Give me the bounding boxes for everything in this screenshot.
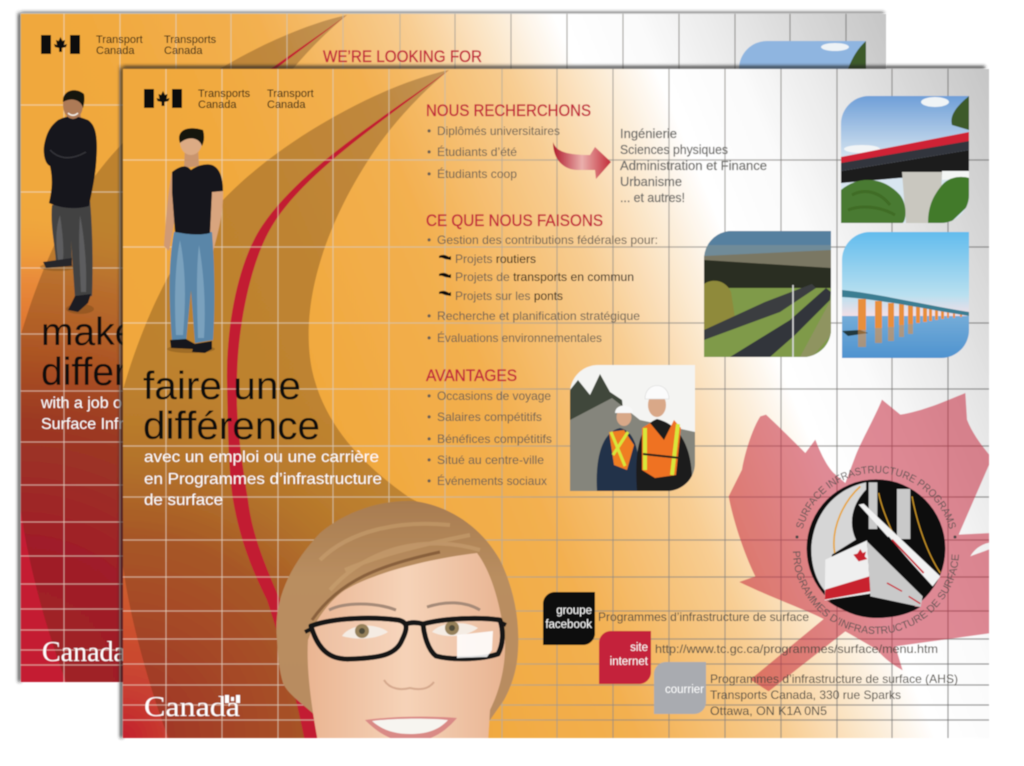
photo: two workers in safety vests (570, 365, 695, 491)
contact: website: http://www.tc.gc.ca/programmes/surface/menu.htm (655, 642, 938, 656)
section: avantages: AVANTAGES (426, 366, 517, 385)
list of fields (620, 127, 767, 205)
headline: faire une (143, 365, 301, 408)
eyes (342, 621, 478, 639)
section: avantages: Occasions de voyage (437, 389, 551, 403)
section: ce que nous faisons: Gestion des contributions fédérales pour: (437, 233, 658, 247)
red swoosh line (227, 70, 449, 742)
contact: mail: Ottawa, ON K1A 0N5 (710, 704, 827, 718)
section: avantages: Bénéfices compétitifs (437, 432, 552, 446)
government signature: Transports (198, 88, 251, 100)
front poster shadow (120, 66, 985, 738)
list of fields: Sciences physiques (620, 143, 728, 157)
section: avantages: • (427, 432, 431, 446)
grid lines overlay (123, 69, 989, 738)
government signature (144, 88, 314, 111)
list of fields: Ingénierie (620, 127, 677, 141)
contact: facebook group: Programmes d’infrastructure de surface (598, 610, 809, 624)
back poster photo sliver (739, 41, 866, 69)
section: nous recherchons: Étudiants d’été (437, 144, 517, 159)
front poster (French version) (122, 68, 990, 739)
section: ce que nous faisons: Projets de transports en commun (455, 270, 634, 284)
section: nous recherchons: • (427, 124, 431, 138)
contact: facebook group: facebook (545, 619, 592, 631)
headline (143, 370, 319, 440)
subtitle: avec un emploi ou une carrière (144, 449, 379, 466)
back poster government signature (41, 34, 217, 57)
logo: surface infrastructure programs: PROGRAMMES D’INFRASTRUCTURE DE SURFACE (792, 550, 960, 634)
section: avantages: • (427, 410, 431, 424)
back poster man with crossed arms (40, 90, 97, 314)
lens glare (457, 631, 493, 658)
list of fields: Administration et Finance (620, 159, 767, 173)
section: avantages: Événements sociaux (437, 473, 547, 488)
glasses (305, 618, 506, 659)
contact: website (599, 631, 938, 684)
back poster shadow (18, 12, 884, 682)
back poster subtitle: with a job or career (40, 395, 178, 412)
face (308, 553, 505, 742)
section: ce que nous faisons: Projets sur les ponts (455, 289, 563, 303)
logo: surface infrastructure programs (792, 465, 960, 634)
back poster body: difference (41, 351, 212, 394)
subtitle: en Programmes d’infrastructure (144, 471, 382, 488)
brown swoosh (120, 70, 449, 742)
section: avantages: • (427, 389, 431, 403)
Canada wordmark: Canada (144, 691, 240, 723)
section: ce que nous faisons: Évaluations environnementales (437, 330, 602, 345)
section: nous recherchons: • (427, 145, 431, 159)
back poster (English version) (18, 12, 887, 687)
section: nous recherchons (426, 101, 591, 181)
list of fields: Urbanisme (620, 175, 682, 189)
section: ce que nous faisons: Projets routiers (455, 252, 536, 266)
contact: facebook group: groupe (556, 605, 592, 617)
icon: Canadian flag symbol (144, 89, 182, 108)
hair (276, 501, 518, 720)
section: avantages: Situé au centre-ville (437, 453, 544, 467)
back poster body: Surface Infrastructure (41, 416, 195, 433)
section: nous recherchons: Étudiants coop (437, 166, 517, 181)
nose (384, 680, 434, 689)
back poster government signature: Transport (96, 34, 143, 46)
back poster heading: WE’RE LOOKING FOR (323, 47, 482, 66)
subtitle: de surface (144, 492, 223, 509)
back poster headline: make a (41, 311, 169, 354)
photo: train on bridge (841, 96, 969, 223)
smile (365, 717, 457, 742)
section: avantages (426, 366, 552, 488)
back poster Canada wordmark: Canada (42, 637, 127, 668)
contact: mail: courrier (665, 684, 704, 696)
section: ce que nous faisons (426, 211, 658, 345)
section: nous recherchons: NOUS RECHERCHONS (426, 101, 591, 120)
headline: différence (143, 405, 320, 448)
section: avantages: Salaires compétitifs (437, 410, 542, 424)
section: ce que nous faisons: CE QUE NOUS FAISONS (426, 211, 603, 230)
eyebrows (329, 603, 480, 610)
government signature: Transport (267, 88, 314, 100)
contact: mail: Programmes d’infrastructure de surface (AHS) (710, 672, 958, 686)
arrow (553, 142, 611, 179)
maple leaf watermark (729, 393, 992, 691)
contact: mail (654, 662, 958, 718)
contact: mail: Transports Canada, 330 rue Sparks (710, 688, 901, 702)
photo: highway (704, 231, 831, 357)
back poster government signature: Canada (164, 45, 203, 57)
logo emblem (807, 479, 945, 618)
section: ce que nous faisons: Recherche et planification stratégique (437, 309, 640, 323)
section: avantages: • (427, 474, 431, 488)
government signature: Canada (267, 99, 306, 111)
back poster government signature: Canada (96, 45, 135, 57)
photo: long bridge over water (842, 232, 969, 358)
subtitle (144, 449, 382, 509)
section: ce que nous faisons: • (427, 331, 431, 345)
government signature: Canada (198, 99, 237, 111)
contact: website: internet (610, 656, 649, 668)
contact: website: site (630, 642, 648, 654)
section: nous recherchons: Diplômés universitaires (437, 124, 560, 138)
section: ce que nous faisons: • (427, 233, 431, 247)
circular logo text: SURFACE INFRASTRUCTURE PROGRAMS (796, 465, 956, 530)
man in black t-shirt and jeans (164, 128, 223, 353)
list of fields: ... et autres! (620, 191, 685, 205)
back poster government signature: Transports (164, 34, 217, 46)
section: ce que nous faisons: • (427, 309, 431, 323)
contact: facebook group (543, 592, 809, 645)
front poster background (123, 69, 989, 738)
red corner glow (122, 394, 336, 739)
woman with glasses (276, 501, 518, 742)
back poster body (18, 14, 887, 687)
section: avantages: • (427, 453, 431, 467)
section: nous recherchons: • (427, 167, 431, 181)
